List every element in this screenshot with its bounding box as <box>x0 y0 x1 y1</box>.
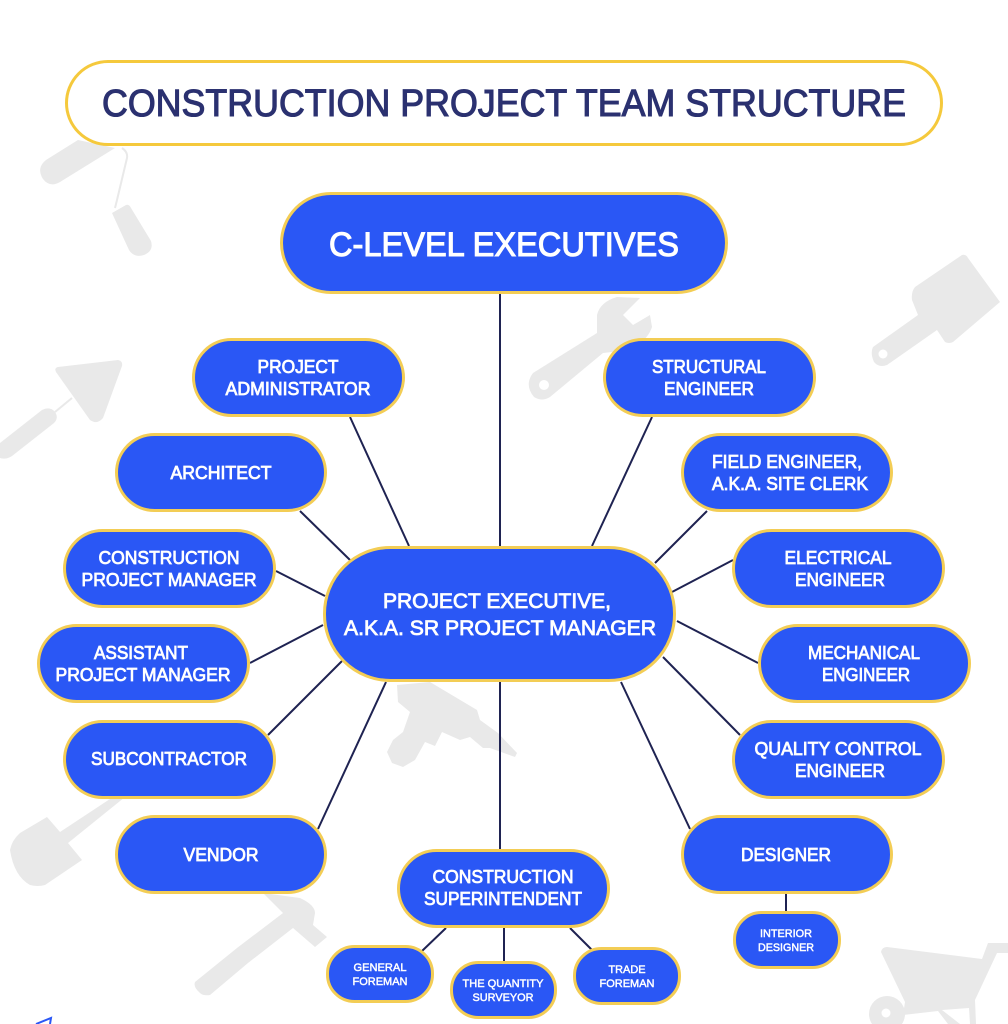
icon: wrench <box>529 297 652 400</box>
connector lines <box>250 293 786 962</box>
node: construction superintendent: CONSTRUCTION <box>432 867 574 887</box>
icon: shovel <box>10 797 125 886</box>
node: field engineer <box>682 434 892 510</box>
node: construction project manager: PROJECT MANAGER <box>82 570 256 590</box>
node: vendor <box>116 816 326 892</box>
node: interior designer: DESIGNER <box>758 942 814 954</box>
node: the quantity surveyor: SURVEYOR <box>472 992 534 1004</box>
node: field engineer: A.K.A. SITE CLERK <box>712 474 868 494</box>
node: assistant project manager <box>38 626 248 702</box>
node: assistant project manager: ASSISTANT <box>94 643 188 663</box>
icon: wheelbarrow <box>869 943 1008 1024</box>
node: electrical engineer <box>734 530 944 606</box>
node: structural engineer <box>604 340 814 416</box>
node: project administrator: PROJECT <box>258 357 338 377</box>
title: CONSTRUCTION PROJECT TEAM STRUCTURE <box>102 83 906 125</box>
node: project executive <box>324 548 674 680</box>
node: electrical engineer: ENGINEER <box>795 570 885 590</box>
node: subcontractor <box>64 722 274 798</box>
icon: paint brush <box>872 255 1000 366</box>
node: project administrator <box>194 340 404 416</box>
node: general foreman <box>328 946 432 1002</box>
node: construction project manager <box>64 530 274 606</box>
icon: drill <box>387 682 517 767</box>
node: structural engineer: STRUCTURAL <box>652 357 766 377</box>
node: subcontractor: SUBCONTRACTOR <box>91 749 247 769</box>
node: project executive: A.K.A. SR PROJECT MANAGER <box>344 617 656 640</box>
node: mechanical engineer <box>760 626 970 702</box>
node: interior designer <box>734 912 840 968</box>
node: quality control engineer: ENGINEER <box>795 761 885 781</box>
node: designer <box>682 816 892 892</box>
node: mechanical engineer: ENGINEER <box>822 665 910 685</box>
node: assistant project manager: PROJECT MANAGER <box>56 665 230 685</box>
node: quality control engineer: QUALITY CONTROL <box>754 739 922 759</box>
node: general foreman: FOREMAN <box>352 976 408 988</box>
node: general foreman: GENERAL <box>354 962 406 974</box>
node: construction superintendent <box>398 850 608 926</box>
node: architect <box>116 434 326 510</box>
node: C-level executives <box>282 194 726 292</box>
node: architect: ARCHITECT <box>170 463 272 483</box>
icon: hammer <box>195 893 327 995</box>
node: construction superintendent: SUPERINTENDENT <box>424 889 582 909</box>
node: trade foreman: FOREMAN <box>600 978 655 990</box>
node: C-level executives: C-LEVEL EXECUTIVES <box>329 226 679 264</box>
node: quality control engineer <box>734 722 944 798</box>
node: structural engineer: ENGINEER <box>664 379 754 399</box>
node: trade foreman: TRADE <box>608 964 646 976</box>
icon: clipped blue logo mark <box>36 1018 51 1024</box>
node: the quantity surveyor: THE QUANTITY <box>462 978 544 990</box>
node: field engineer: FIELD ENGINEER, <box>712 452 862 472</box>
title <box>66 62 942 144</box>
node: mechanical engineer: MECHANICAL <box>808 643 920 663</box>
node: the quantity surveyor <box>452 962 556 1018</box>
node: construction project manager: CONSTRUCTION <box>98 548 240 568</box>
node: interior designer: INTERIOR <box>760 928 812 940</box>
node: designer: DESIGNER <box>741 845 831 865</box>
node: trade foreman <box>574 948 680 1004</box>
icon: paint roller <box>40 140 152 256</box>
icon: trowel <box>0 360 122 459</box>
node: project executive: PROJECT EXECUTIVE, <box>383 590 611 613</box>
node: electrical engineer: ELECTRICAL <box>784 548 892 568</box>
node: vendor: VENDOR <box>184 845 258 865</box>
node: project administrator: ADMINISTRATOR <box>226 379 370 399</box>
